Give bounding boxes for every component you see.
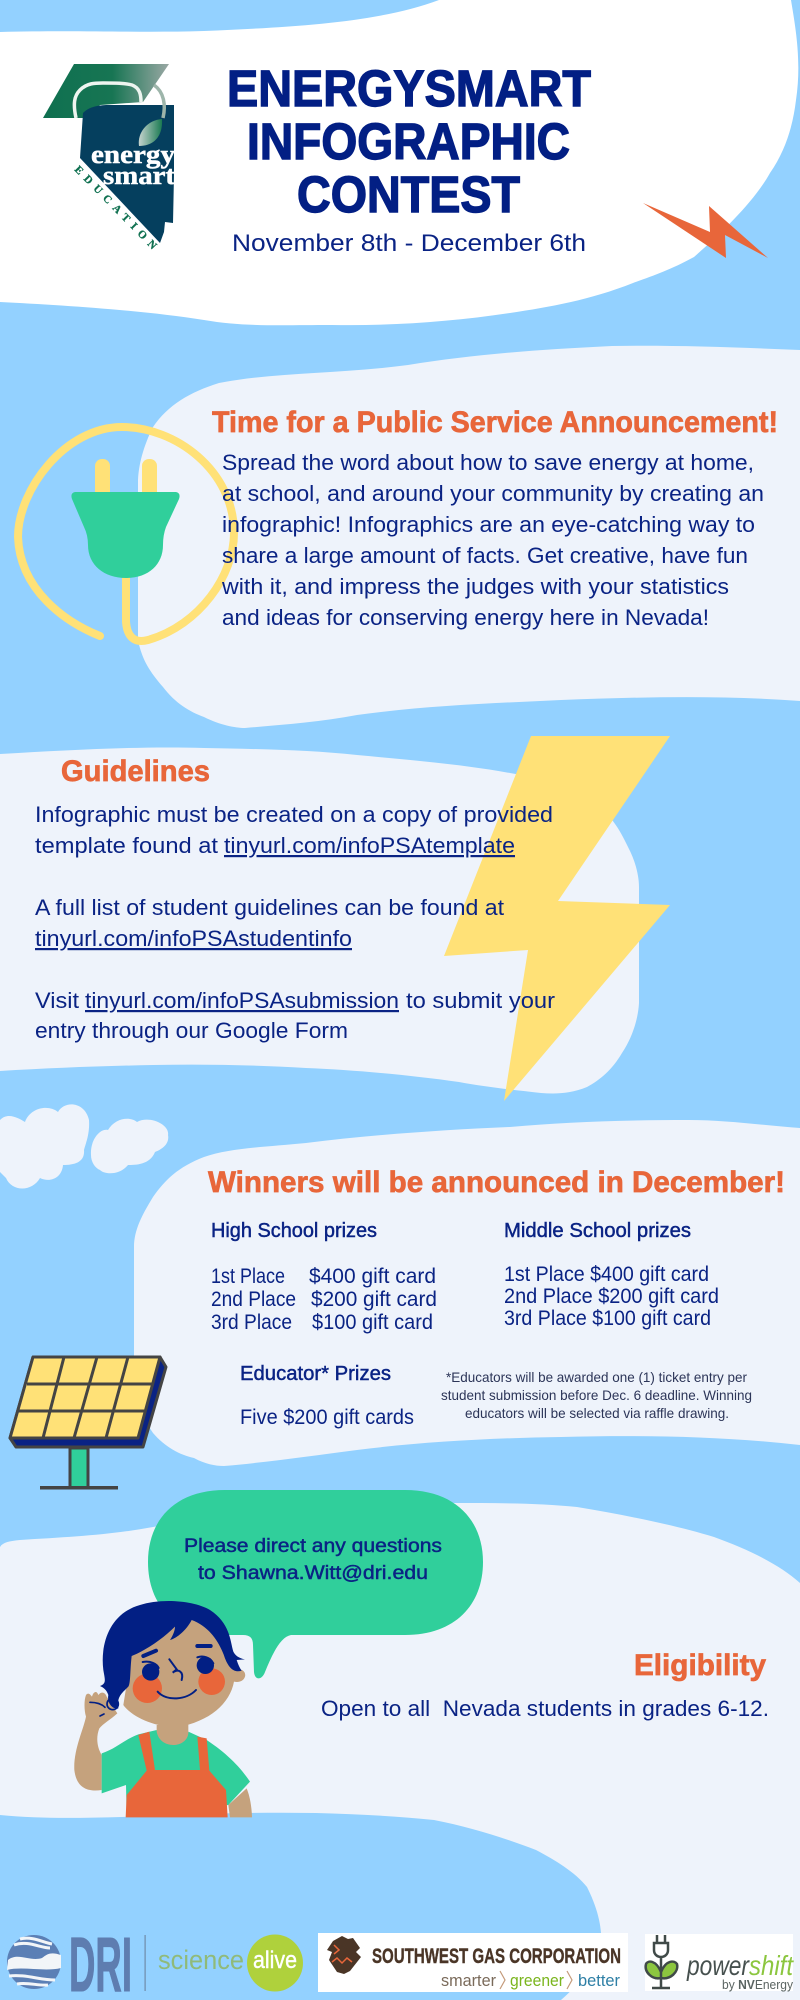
footnote: student submission before Dec. 6 deadline. Winning <box>441 1387 752 1403</box>
educator prizes: Educator* Prizes <box>240 1363 391 1385</box>
logo: powershift <box>645 1934 794 1992</box>
text: public service announcement <box>212 406 778 630</box>
submission: Visit <box>35 988 79 1013</box>
submission: tinyurl.com/infoPSAsubmission <box>85 988 399 1013</box>
body: and ideas for conserving energy here in Nevada! <box>222 605 709 630</box>
neck and head <box>123 1617 245 1745</box>
divider <box>144 1935 146 1991</box>
logo: Southwest Gas: smarter <box>441 1971 496 1990</box>
title <box>227 60 591 223</box>
high school prizes: $400 gift card <box>309 1265 436 1288</box>
logo: Southwest Gas <box>318 1933 628 1992</box>
text: guidelines <box>35 755 555 1043</box>
high school prizes: $100 gift card <box>312 1311 433 1334</box>
panel: guidelines <box>0 747 639 1093</box>
panel: header <box>0 0 798 325</box>
question text <box>184 1536 442 1584</box>
template instruction: tinyurl.com/infoPSAtemplate <box>224 833 515 858</box>
logo: EnergySmart Education: energy <box>91 140 175 169</box>
apron <box>126 1732 228 1817</box>
text: winners <box>208 1166 785 1429</box>
right arm <box>228 1788 252 1817</box>
clouds <box>0 1104 168 1188</box>
icon: orange lightning bolt <box>643 203 768 258</box>
globe <box>7 1935 61 1989</box>
shirt <box>102 1730 250 1817</box>
left arm <box>74 1692 117 1790</box>
logo: Southwest Gas: better <box>578 1971 620 1990</box>
logo: powershift: shift <box>749 1950 794 1981</box>
logo: science alive: alive <box>253 1947 297 1974</box>
body: Open to all Nevada students in grades 6-12. <box>321 1696 769 1721</box>
icon: solar panel <box>10 1357 166 1490</box>
logo: Southwest Gas: greener <box>510 1971 564 1990</box>
student guidelines <box>35 895 504 951</box>
high school prizes: $200 gift card <box>311 1288 437 1311</box>
submission <box>35 988 555 1043</box>
logo: science alive <box>158 1934 303 1992</box>
heading: Time for a Public Service Announcement! <box>212 406 778 439</box>
logo: EnergySmart Education <box>43 64 175 252</box>
panel: eligibility <box>0 1500 800 2000</box>
shape: lower blue background <box>0 1813 601 2000</box>
cheeks <box>133 1668 225 1703</box>
middle school prizes: 3rd Place $100 gift card <box>504 1307 711 1330</box>
template instruction: template found at <box>35 833 218 858</box>
logo: EnergySmart Education: smart <box>103 161 175 190</box>
template instruction: Infographic must be created on a copy of provided <box>35 802 553 827</box>
title: INFOGRAPHIC <box>247 113 570 170</box>
question text: Please direct any questions <box>184 1536 442 1557</box>
heading: Eligibility <box>634 1649 766 1682</box>
educator prizes <box>240 1363 414 1429</box>
body: share a large amount of facts. Get creative, have fun <box>222 543 748 568</box>
high school prizes: 2nd Place <box>211 1288 296 1311</box>
template instruction <box>35 802 553 858</box>
heading: Winners will be announced in December! <box>208 1166 785 1199</box>
title: CONTEST <box>297 166 520 223</box>
logo: DRI <box>7 1922 132 2000</box>
question text: to Shawna.Witt@dri.edu <box>198 1563 428 1584</box>
plug and leaves mark <box>646 1935 677 1988</box>
face details <box>90 1646 214 1716</box>
high school prizes: High School prizes <box>211 1220 377 1242</box>
body: Spread the word about how to save energy at home, <box>222 450 754 475</box>
footnote: *Educators will be awarded one (1) ticket entry per <box>446 1369 747 1385</box>
logo: powershift: by NVEnergy <box>722 1977 793 1992</box>
middle school prizes: 1st Place $400 gift card <box>504 1263 709 1286</box>
high school prizes: 1st Place <box>211 1265 285 1288</box>
panel: winners <box>134 1120 800 1466</box>
hair <box>100 1601 245 1709</box>
high school prizes <box>211 1220 437 1334</box>
text: eligibility <box>321 1649 769 1721</box>
high school prizes: 3rd Place <box>211 1311 292 1334</box>
logo: science alive: science <box>158 1945 244 1975</box>
speech bubble <box>148 1490 483 1678</box>
body: at school, and around your community by creating an <box>222 481 764 506</box>
submission: entry through our Google Form <box>35 1018 348 1043</box>
character: child waving <box>74 1601 252 1817</box>
middle school prizes: Middle School prizes <box>504 1220 691 1242</box>
educator prizes: Five $200 gift cards <box>240 1406 414 1429</box>
student guidelines: tinyurl.com/infoPSAstudentinfo <box>35 926 352 951</box>
logo: Southwest Gas: SOUTHWEST GAS CORPORATION <box>372 1945 621 1968</box>
footnote <box>441 1369 752 1421</box>
body: infographic! Infographics are an eye-catching way to <box>222 512 755 537</box>
heading: Guidelines <box>61 755 210 788</box>
middle school prizes: 2nd Place $200 gift card <box>504 1285 719 1308</box>
date range: November 8th - December 6th <box>232 230 586 257</box>
logo: powershift: power <box>686 1950 750 1981</box>
submission: to submit your <box>406 988 555 1013</box>
icon: plug <box>18 427 234 641</box>
student guidelines: A full list of student guidelines can be found at <box>35 895 504 920</box>
body: with it, and impress the judges with your statistics <box>221 574 729 599</box>
body <box>221 450 764 630</box>
title: ENERGYSMART <box>227 60 591 117</box>
icon: yellow lightning bolt <box>444 736 670 1101</box>
middle school prizes <box>504 1220 719 1330</box>
panel: public service announcement <box>138 346 800 728</box>
diamond mark <box>327 1936 361 1974</box>
logo: EnergySmart Education: EDUCATION <box>72 164 159 252</box>
footnote: educators will be selected via raffle drawing. <box>465 1405 729 1421</box>
